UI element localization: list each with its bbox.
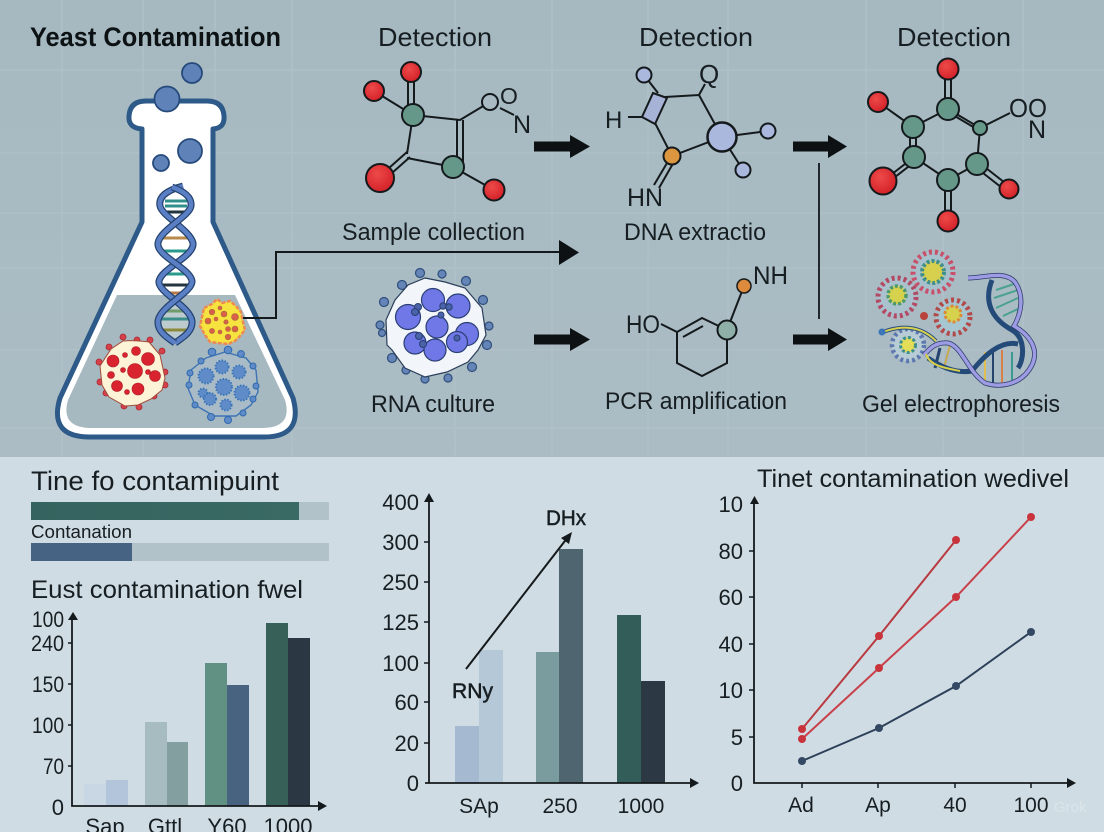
flask liquid bbox=[66, 295, 287, 428]
trend arrow bbox=[466, 532, 572, 669]
yellow yeast cell bbox=[200, 299, 245, 344]
line chart: 60 bbox=[719, 585, 743, 610]
flow arrow 2 bbox=[793, 135, 847, 158]
molecule 3: N bbox=[1028, 116, 1046, 144]
line chart: 10 bbox=[719, 678, 743, 703]
label: contanation: Contanation bbox=[31, 522, 132, 542]
flask body bbox=[57, 101, 295, 437]
gel electrophoresis illustration bbox=[878, 252, 1035, 385]
red yeast cell bbox=[96, 334, 168, 410]
heading: left bar chart: Eust contamination fwel bbox=[31, 576, 303, 604]
line chart: 10 bbox=[719, 492, 743, 517]
connector arrow from yeast cell bbox=[243, 240, 579, 318]
middle bar chart: 1000 bbox=[618, 795, 664, 818]
heading: detection 2: Detection bbox=[639, 22, 753, 52]
bubble 2 bbox=[154, 86, 180, 112]
DNA ribbon bbox=[924, 275, 1035, 385]
title: Yeast Contamination bbox=[30, 22, 281, 52]
label: sample collection: Sample collection bbox=[342, 219, 525, 246]
left bar chart: 100 bbox=[32, 713, 64, 738]
middle bar chart: SAp bbox=[459, 795, 499, 818]
middle bar chart: 250 bbox=[542, 795, 578, 818]
blue yeast cell bbox=[186, 346, 259, 424]
series: red lower bbox=[798, 513, 1035, 743]
line chart: 40 bbox=[719, 632, 743, 657]
background: lower panel bbox=[0, 457, 1104, 832]
molecule 3: OO bbox=[1009, 93, 1047, 123]
bar 2 bbox=[31, 543, 329, 561]
label: DNA extraction: DNA extractio bbox=[624, 219, 766, 246]
left bar chart bbox=[31, 607, 327, 832]
molecule 2 bbox=[605, 59, 776, 212]
line chart: 40 bbox=[943, 794, 967, 817]
line chart: Ap bbox=[865, 794, 891, 817]
label: PCR amplification: PCR amplification bbox=[605, 388, 787, 415]
middle bar chart: 125 bbox=[382, 610, 419, 635]
molecule 3 bbox=[868, 58, 1047, 232]
microbe cluster bbox=[878, 252, 970, 361]
watermark: Grok bbox=[1054, 799, 1087, 816]
heading: detection 1: Detection bbox=[378, 22, 492, 52]
left bar chart: 240 bbox=[31, 631, 64, 656]
flask illustration bbox=[57, 63, 295, 437]
molecule 2: Q bbox=[699, 59, 719, 89]
bubble 3 bbox=[178, 139, 202, 163]
vertical connector bbox=[818, 163, 820, 319]
left bar chart: 0 bbox=[52, 795, 64, 820]
middle bar chart: 400 bbox=[382, 490, 419, 515]
line chart bbox=[719, 492, 1076, 817]
middle bar chart: 300 bbox=[382, 530, 419, 555]
label: gel electrophoresis: Gel electrophoresis bbox=[862, 391, 1060, 418]
series: navy bbox=[798, 628, 1035, 765]
label: RNy: RNy bbox=[452, 680, 493, 703]
PCR molecule bbox=[626, 262, 788, 376]
label: DHx: DHx bbox=[546, 507, 586, 530]
DNA helix bbox=[158, 186, 193, 343]
label: RNA culture: RNA culture bbox=[371, 391, 495, 418]
molecule 1: O bbox=[500, 83, 518, 109]
heading: time of contamination: Tine fo contamipuint bbox=[31, 466, 279, 496]
RNA culture cell bbox=[376, 268, 493, 383]
middle bar chart: 100 bbox=[382, 651, 419, 676]
molecule 2: HN bbox=[627, 184, 663, 212]
middle bar chart: 60 bbox=[395, 690, 419, 715]
bar 1 bbox=[31, 502, 329, 520]
flow arrow 4 bbox=[793, 328, 847, 351]
line chart: 80 bbox=[719, 539, 743, 564]
bubble 4 bbox=[153, 155, 169, 171]
molecule 1 bbox=[364, 62, 531, 200]
background: upper panel bbox=[0, 0, 1104, 457]
molecule 2: H bbox=[605, 107, 622, 134]
left bar chart: 100 bbox=[32, 607, 64, 632]
PCR molecule: HO bbox=[626, 311, 660, 339]
line chart: 5 bbox=[731, 725, 743, 750]
middle bar chart: 20 bbox=[395, 731, 419, 756]
molecule 1: N bbox=[513, 111, 531, 139]
middle bar chart: 0 bbox=[407, 771, 419, 796]
series: red upper bbox=[798, 536, 960, 733]
left bar chart: 150 bbox=[32, 672, 64, 697]
PCR molecule: NH bbox=[753, 262, 788, 290]
line chart: Ad bbox=[788, 794, 814, 817]
bubble 1 bbox=[182, 63, 202, 83]
flow arrow 3 bbox=[534, 328, 590, 351]
line chart: 100 bbox=[1013, 794, 1049, 817]
flow arrow 1 bbox=[534, 135, 590, 158]
heading: line chart: Tinet contamination wedivel bbox=[757, 465, 1069, 493]
panel: contamination progress bars bbox=[31, 466, 329, 561]
heading: detection 3: Detection bbox=[897, 22, 1011, 52]
left bar chart: 70 bbox=[43, 754, 64, 779]
line chart: 0 bbox=[731, 771, 743, 796]
middle bar chart: 250 bbox=[382, 570, 419, 595]
middle bar chart bbox=[382, 490, 699, 818]
